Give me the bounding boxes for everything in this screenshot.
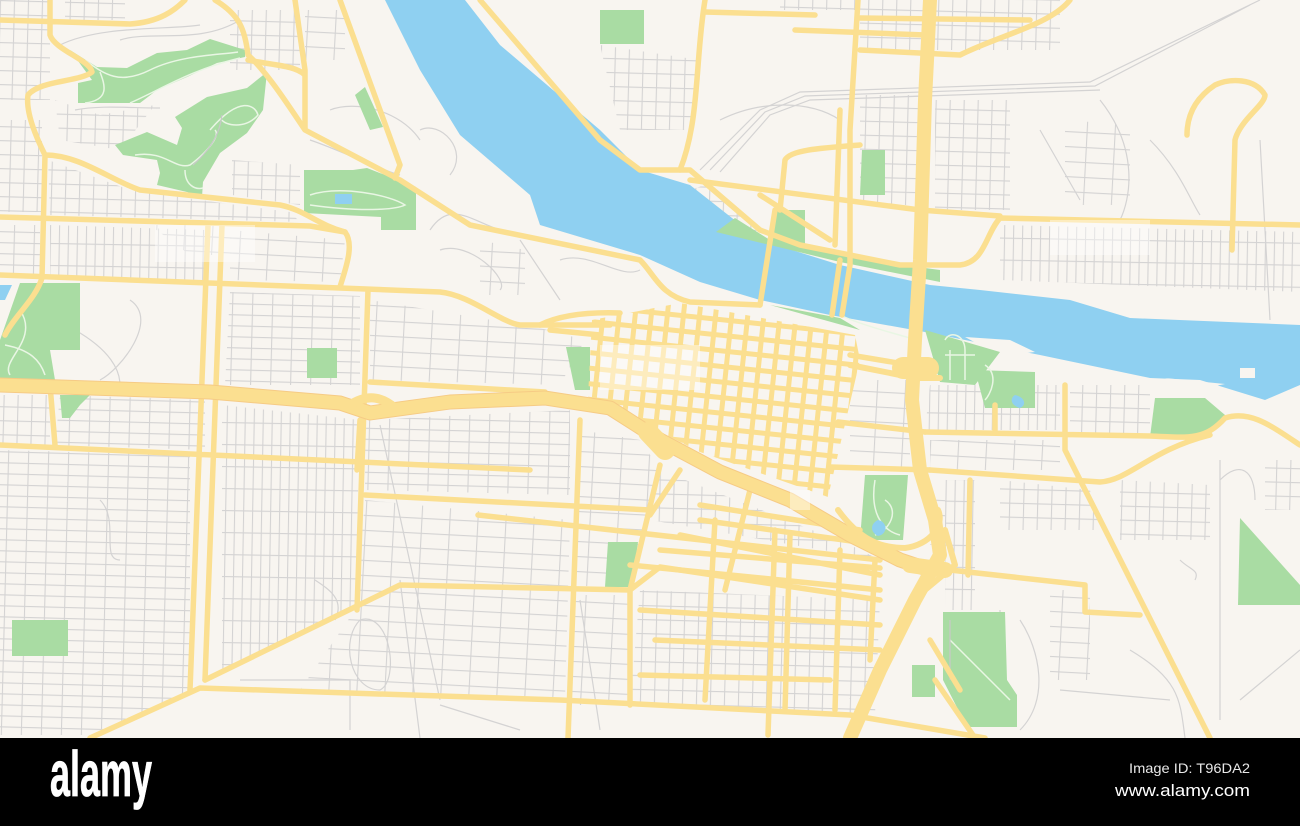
footer bar <box>0 738 1300 826</box>
logo: alamy: alamy <box>50 738 152 810</box>
river <box>385 0 1300 400</box>
image id: Image ID: T96DA2 <box>1129 760 1250 776</box>
highways <box>0 0 955 738</box>
park paths and ponds <box>0 52 1024 700</box>
website: www.alamy.com <box>1114 782 1250 800</box>
watermark haze <box>155 220 1150 510</box>
river islands and cutouts <box>965 337 1255 388</box>
downtown street grid <box>588 303 860 497</box>
